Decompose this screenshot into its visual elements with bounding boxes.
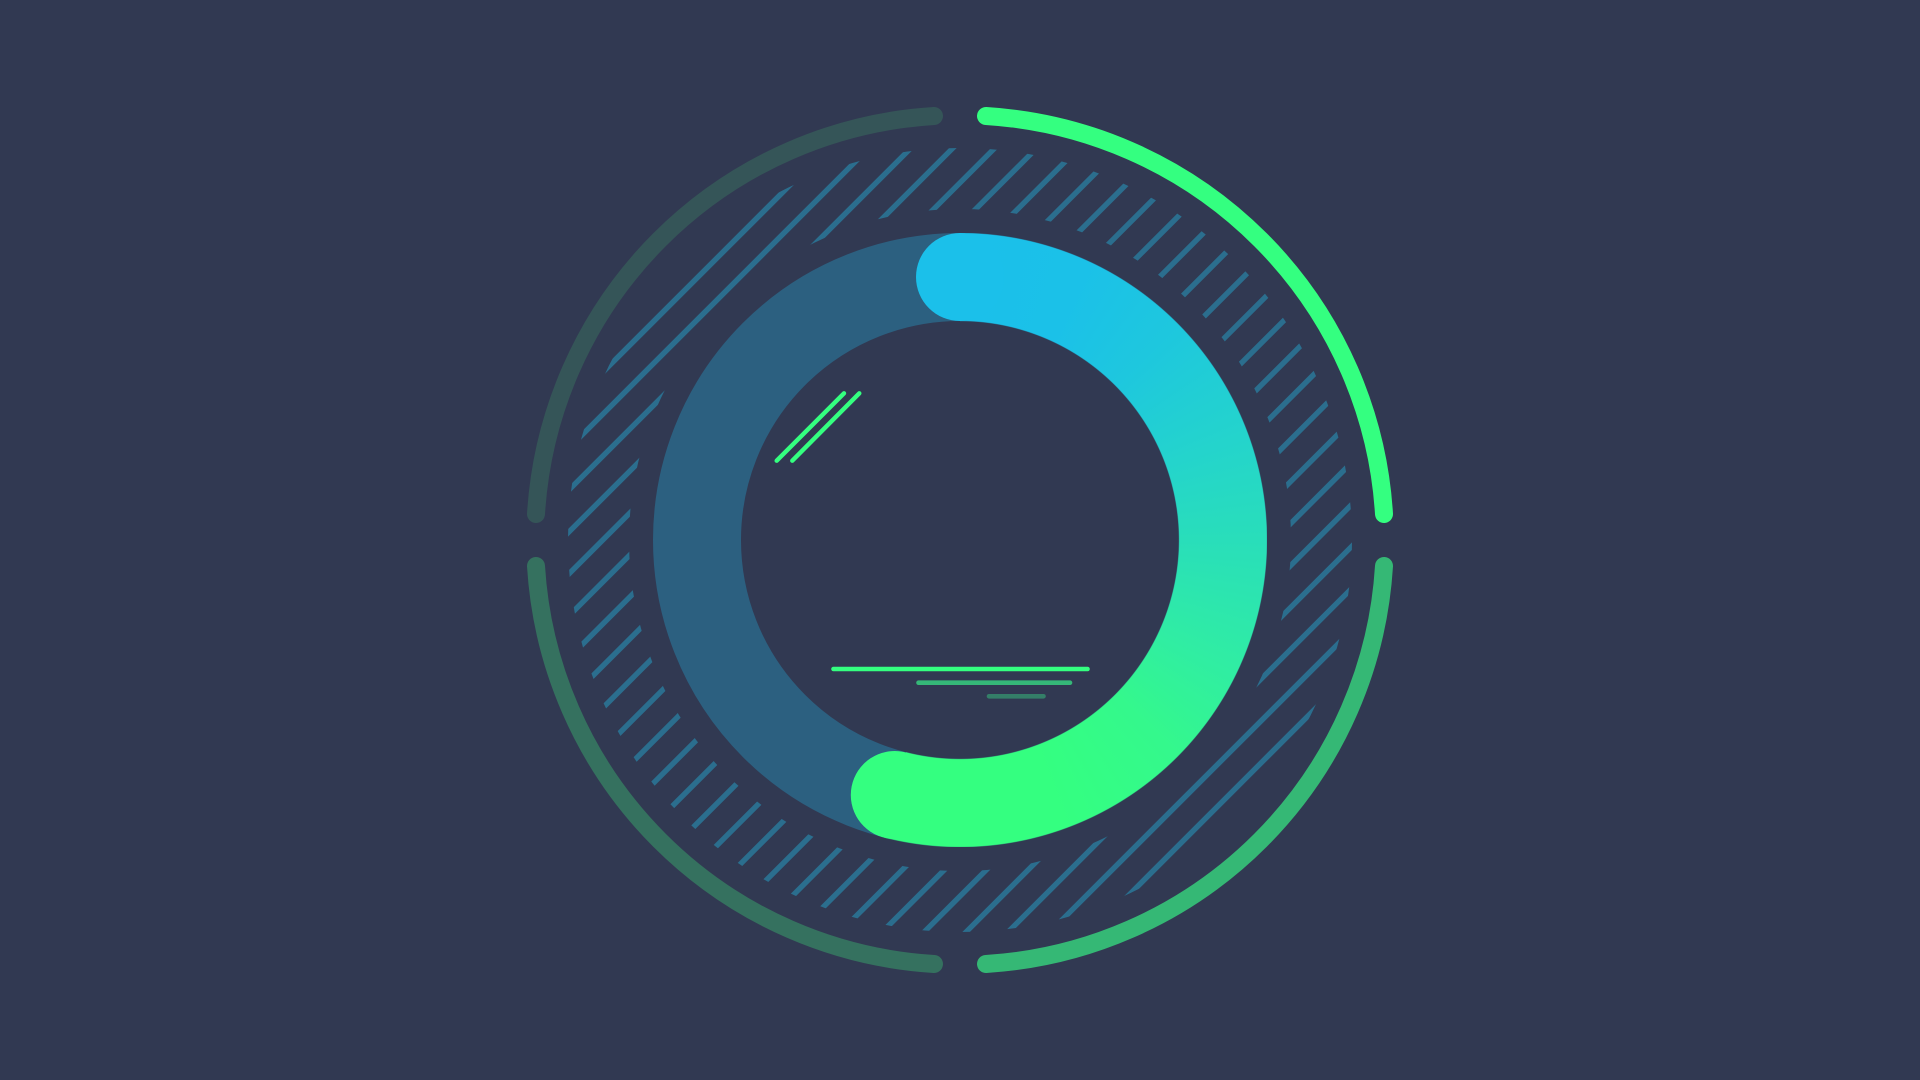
outer arc: top left <box>536 116 934 514</box>
placeholder line 3 <box>989 694 1044 699</box>
icon: two diagonal accent lines <box>777 393 859 461</box>
text placeholder lines <box>834 669 1088 696</box>
hatched ring <box>560 140 1360 940</box>
background layer: outer arcs, hatching and donut track <box>527 107 1393 973</box>
progress end cap <box>851 751 939 839</box>
placeholder line 2 <box>918 680 1070 685</box>
donut track <box>697 277 1223 803</box>
outer arc: bottom right <box>986 566 1384 964</box>
outer arc: top right <box>986 116 1384 514</box>
donut progress arc with blue to green gradient <box>884 233 1267 847</box>
outer arc: bottom left <box>536 566 934 964</box>
progress start cap <box>916 233 1004 321</box>
radial progress graphic <box>527 107 1393 973</box>
placeholder line 1 <box>834 667 1088 671</box>
